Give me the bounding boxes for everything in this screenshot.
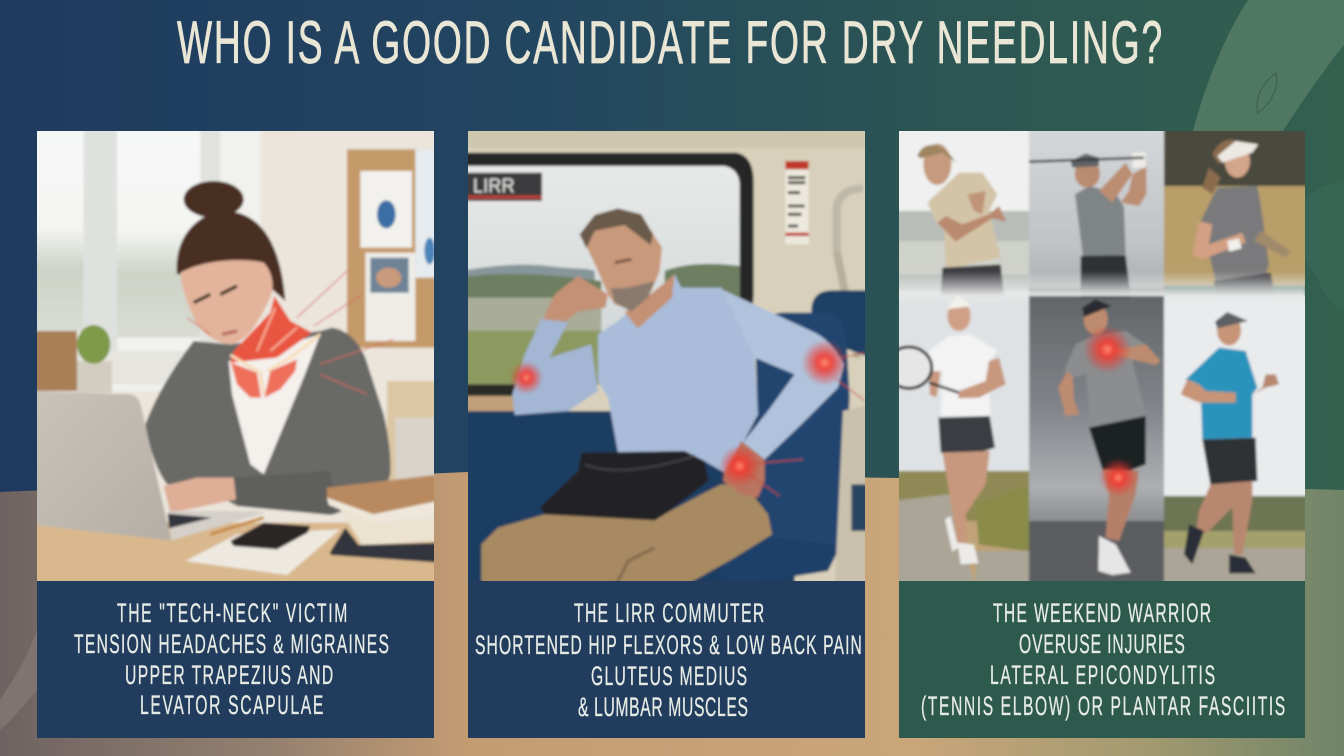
LIRR sign label: LIRR	[473, 175, 515, 198]
seats	[461, 411, 795, 588]
caption line 3: LATERAL EPICONDYLITIS	[990, 660, 1215, 690]
caption: LIRR commuter	[468, 581, 865, 738]
neck with highlighted muscles	[230, 296, 312, 363]
athlete: woman with racket	[886, 295, 1006, 564]
left sleeve	[512, 318, 598, 415]
right arm	[718, 288, 844, 459]
cell backgrounds	[892, 124, 1311, 588]
caption line 1: THE LIRR COMMUTER	[574, 598, 764, 628]
athlete: man in blue shirt	[1181, 312, 1279, 573]
caption line 1: THE "TECH-NECK" VICTIM	[117, 598, 347, 628]
pain points	[510, 361, 543, 394]
caption line 2: TENSION HEADACHES & MIGRAINES	[74, 629, 389, 659]
black bag	[540, 451, 709, 520]
caption line 4: LEVATOR SCAPULAE	[140, 690, 323, 720]
books, phone and notebook	[327, 474, 440, 514]
caption line 1: THE WEEKEND WARRIOR	[993, 598, 1211, 628]
white shirt	[229, 334, 320, 474]
shirt body	[598, 274, 758, 473]
title: WHO IS A GOOD CANDIDATE FOR DRY NEEDLING?	[177, 9, 1162, 76]
panel: LIRR commuter	[461, 124, 875, 738]
panel: weekend warrior	[886, 124, 1311, 738]
athlete: woman with visor	[1192, 140, 1291, 299]
caption line 2: OVERUSE INJURIES	[1019, 629, 1185, 659]
trousers	[481, 484, 772, 588]
caption line 3: UPPER TRAPEZIUS AND	[125, 660, 333, 690]
panel: tech-neck victim	[30, 124, 444, 738]
athlete: man in beige shirt	[917, 144, 1006, 298]
photo: woman at laptop	[30, 124, 444, 591]
photo grid: six athletes	[886, 124, 1311, 588]
caption line 3: GLUTEUS MEDIUS	[591, 661, 747, 691]
hand on hip	[723, 441, 765, 498]
laptop	[169, 511, 265, 540]
hair and bun	[184, 181, 244, 218]
face	[180, 260, 273, 344]
athlete: man with knee pain	[1058, 299, 1161, 575]
athlete: golfer	[1029, 153, 1146, 298]
cardigan	[145, 328, 391, 515]
caption: tech-neck victim	[37, 581, 434, 738]
photo: man on train	[461, 124, 875, 591]
caption line 2: SHORTENED HIP FLEXORS & LOW BACK PAIN	[475, 630, 862, 660]
neck and forearm hand	[625, 274, 675, 328]
caption line 4: & LUMBAR MUSCLES	[578, 692, 748, 722]
sleeve and hand	[234, 471, 335, 514]
row fade	[892, 271, 1306, 296]
head	[586, 218, 662, 311]
caption line 4: (TENNIS ELBOW) OR PLANTAR FASCIITIS	[921, 691, 1285, 721]
caption: weekend warrior	[899, 581, 1305, 738]
safety notice sticker	[785, 161, 809, 244]
